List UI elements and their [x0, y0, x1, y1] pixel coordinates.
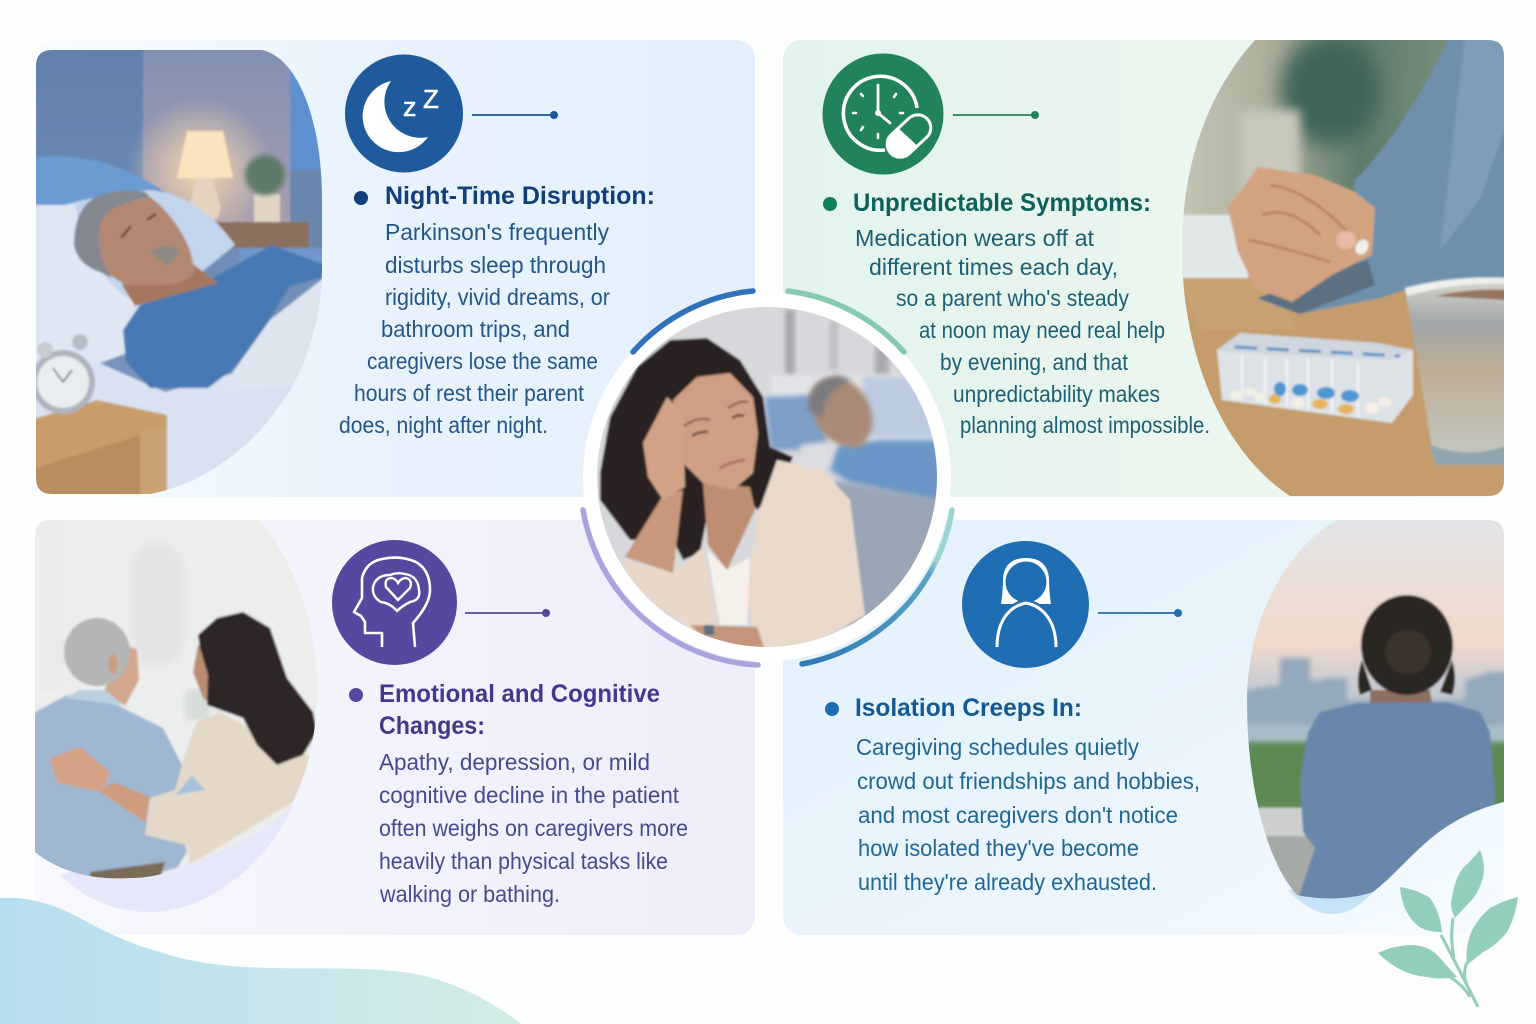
body text: so a parent who's steady: [896, 285, 1129, 311]
body text: [379, 749, 688, 907]
body text: at noon may need real help: [919, 317, 1165, 343]
heading: Emotional and Cognitive: [379, 680, 660, 708]
icon: moon and sleep: z: [403, 92, 416, 122]
body text: does, night after night.: [339, 412, 548, 438]
panel: night-time disruption: [30, 40, 755, 500]
icon: leaf sprig: [1378, 850, 1518, 1007]
heading: Isolation Creeps In:: [855, 694, 1082, 722]
body text: hours of rest their parent: [354, 380, 585, 406]
background wave: [0, 898, 522, 1024]
photo: hand holding pill over pill box: [1178, 35, 1508, 500]
photo halo: [60, 805, 293, 912]
icon: moon and sleep: Z: [423, 84, 439, 114]
body text: cognitive decline in the patient: [379, 782, 680, 808]
photo: man sleeping in bed: [30, 45, 330, 500]
arc: blue: [633, 291, 753, 352]
connector line: [472, 111, 558, 119]
body text: [855, 225, 1210, 438]
arc: blue to teal: [802, 510, 952, 664]
photo: couple embracing: [30, 515, 325, 885]
panel: unpredictable symptoms: [783, 35, 1508, 500]
icon: clock and pill: [822, 54, 944, 174]
central photo ring: [583, 293, 951, 661]
body text: bathroom trips, and: [381, 316, 570, 342]
body text: Apathy, depression, or mild: [379, 749, 650, 775]
heading: Night-Time Disruption:: [385, 182, 655, 210]
arc: green: [788, 291, 904, 352]
body text: planning almost impossible.: [960, 412, 1210, 438]
bullet: [825, 702, 839, 716]
body text: by evening, and that: [940, 349, 1129, 375]
bullet: [823, 197, 837, 211]
photo: tired caregiver with parent behind: [595, 305, 945, 660]
panel: emotional and cognitive changes: [30, 515, 755, 935]
body text: Medication wears off at: [855, 225, 1095, 251]
body text: heavily than physical tasks like: [379, 848, 668, 874]
icon: brain and heart in head: [332, 540, 457, 665]
body text: Parkinson's frequently: [385, 219, 609, 245]
body text: unpredictability makes: [953, 381, 1160, 407]
body text: crowd out friendships and hobbies,: [857, 768, 1200, 794]
body text: different times each day,: [869, 254, 1118, 280]
photo halo: [1288, 890, 1375, 914]
body text: often weighs on caregivers more: [379, 815, 688, 841]
bullet: [349, 688, 363, 702]
heading: Unpredictable Symptoms:: [853, 189, 1151, 217]
icon: person silhouette: [962, 541, 1089, 668]
body text: and most caregivers don't notice: [858, 802, 1178, 828]
connector line: [953, 111, 1039, 119]
body text: how isolated they've become: [858, 835, 1139, 861]
body text: [339, 219, 610, 438]
body text: [856, 734, 1200, 895]
body text: disturbs sleep through: [385, 252, 606, 278]
panel: isolation creeps in: [783, 515, 1515, 935]
body text: walking or bathing.: [379, 881, 560, 907]
body text: until they're already exhausted.: [858, 869, 1157, 895]
icon: moon and sleep: [345, 54, 463, 172]
photo: woman looking at city: [1240, 515, 1515, 906]
body text: caregivers lose the same: [367, 348, 598, 374]
body text: Caregiving schedules quietly: [856, 734, 1139, 760]
body text: rigidity, vivid dreams, or: [385, 284, 610, 310]
connector line: [1098, 609, 1182, 617]
heading: [379, 680, 660, 740]
connector line: [465, 609, 550, 617]
arc: purple: [583, 510, 758, 665]
heading: Changes:: [379, 712, 485, 740]
bullet: [354, 191, 368, 205]
